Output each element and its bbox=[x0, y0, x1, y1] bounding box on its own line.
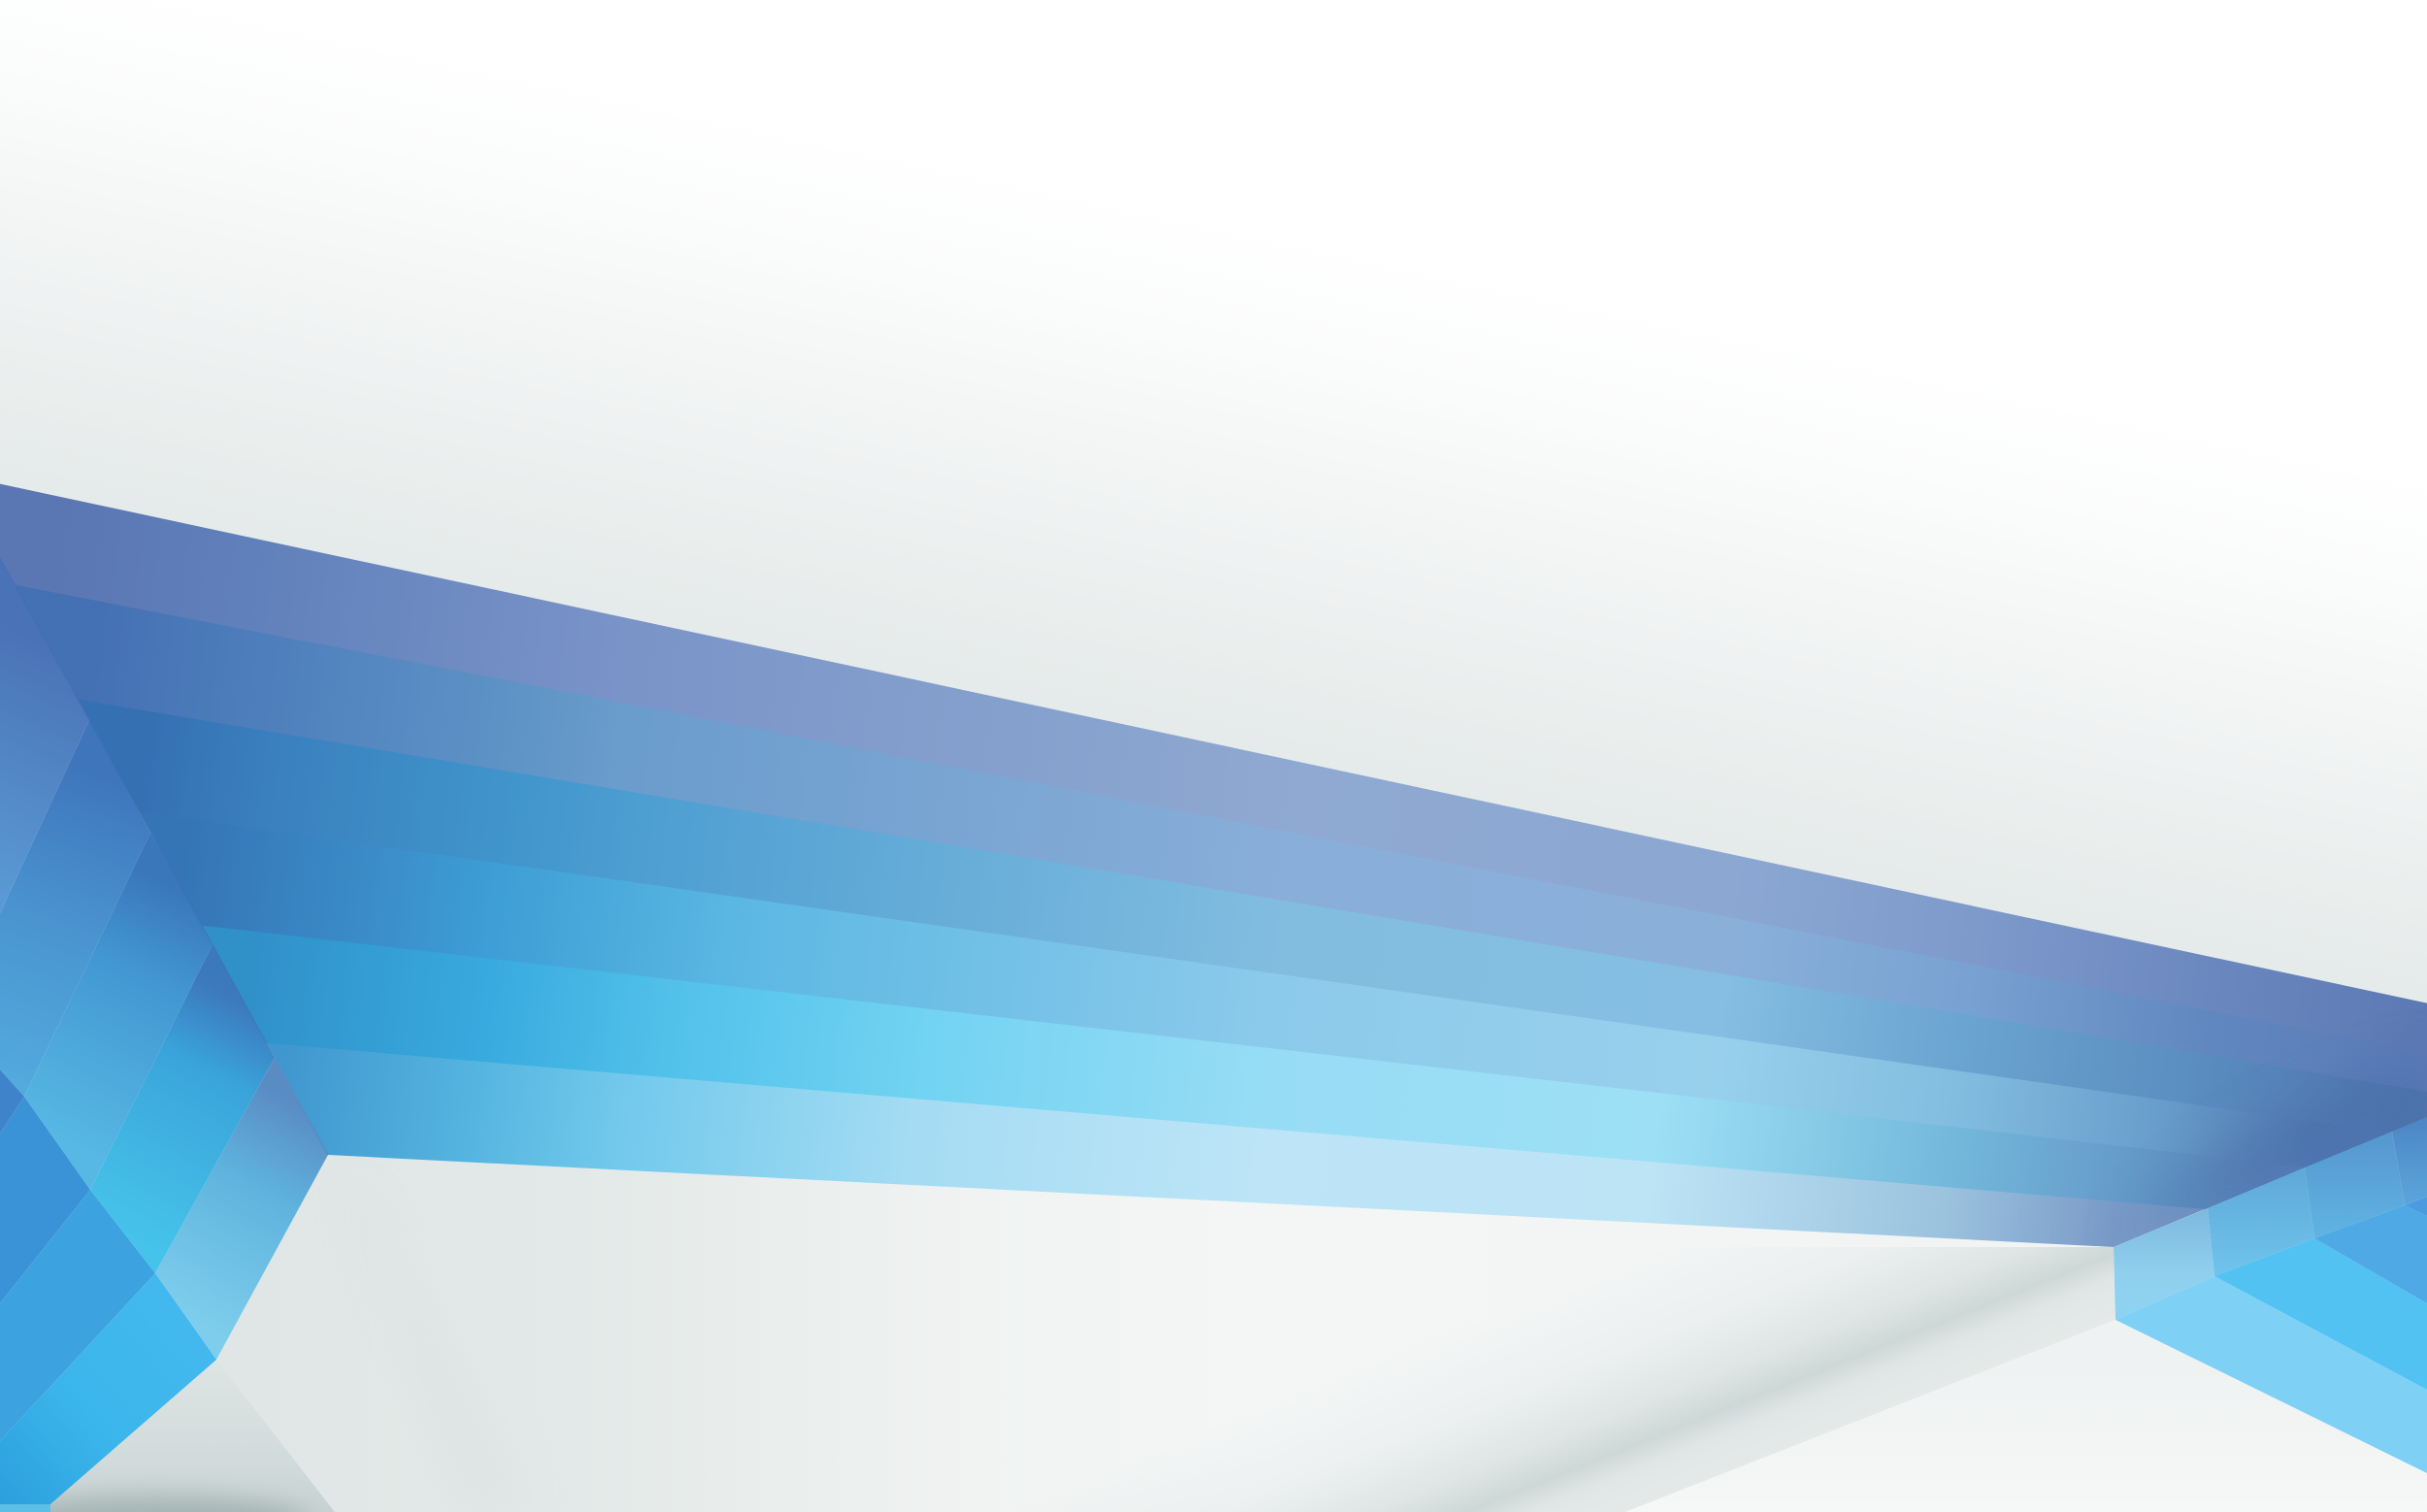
facet column C bbox=[2305, 1132, 2405, 1238]
bottom strip bbox=[0, 1504, 50, 1512]
lower facet 1 bbox=[0, 1069, 24, 1134]
facet column 2 bbox=[0, 720, 150, 1097]
panel: left faceted wing bbox=[0, 558, 328, 1512]
facet column 1 bbox=[0, 558, 89, 913]
diagonal crease bbox=[0, 558, 328, 1155]
facet column 5 bbox=[155, 1058, 328, 1360]
band 3 bbox=[78, 700, 2427, 1133]
panel: blue perspective bands bbox=[0, 484, 2427, 1247]
lower facet R2 bbox=[2214, 1238, 2427, 1390]
band 4 bbox=[140, 812, 2389, 1167]
lower facet 4 bbox=[0, 1273, 216, 1504]
background: upper wall bbox=[0, 0, 2427, 1003]
facet column 4 bbox=[90, 944, 275, 1273]
band 2 bbox=[15, 585, 2427, 1092]
lower facet R3 bbox=[2314, 1205, 2427, 1303]
left floor wedge bbox=[50, 1409, 335, 1512]
lower facet 3 bbox=[0, 1190, 155, 1441]
lower facet 2 bbox=[0, 1097, 90, 1303]
band 1 bbox=[0, 484, 2427, 1053]
panel: right faceted wing bbox=[2114, 1117, 2427, 1473]
band 6 bbox=[267, 1043, 2205, 1247]
lower facet R4 bbox=[2405, 1197, 2427, 1216]
facet column D bbox=[2392, 1117, 2427, 1205]
band shadow toward right wing bbox=[2152, 1081, 2406, 1231]
facet column 3 bbox=[24, 833, 213, 1190]
facet column B bbox=[2208, 1167, 2314, 1276]
panel: lower right floor bbox=[1625, 1320, 2427, 1512]
facet column A bbox=[2114, 1208, 2214, 1320]
panel: lower wall bbox=[0, 1155, 2115, 1512]
lower facet R1 bbox=[2115, 1276, 2427, 1473]
band 5 bbox=[202, 926, 2305, 1209]
